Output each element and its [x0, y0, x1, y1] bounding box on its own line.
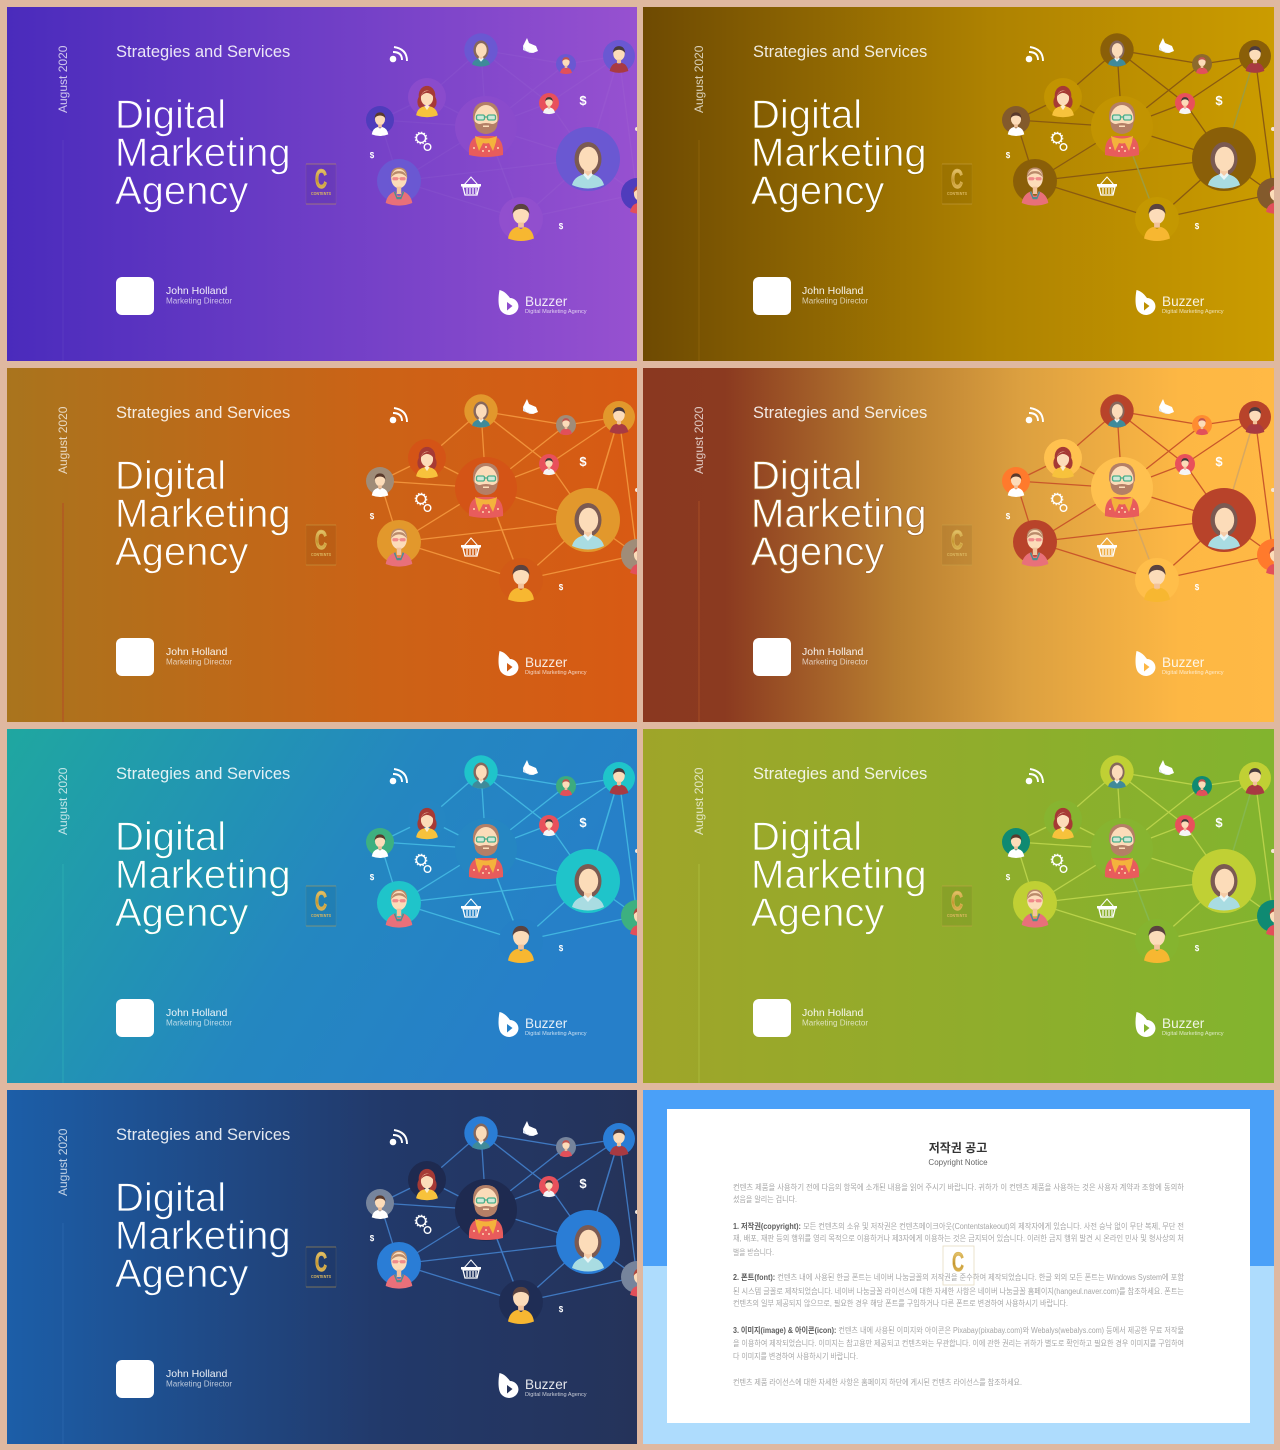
network links [380, 411, 637, 580]
title: Agency [751, 891, 884, 935]
avatars [1002, 394, 1280, 602]
title: Marketing [115, 853, 291, 897]
license note: 컨텐츠 제품 라이선스에 대한 자세한 사항은 홈페이지 하단에 게시된 컨텐츠 라이선스를 참조하세요. [733, 1377, 1022, 1387]
logo: Buzzer: Buzzer [525, 655, 568, 670]
logo: Buzzer: Digital Marketing Agency [1162, 1031, 1224, 1037]
network illustration [366, 1116, 653, 1324]
title: Marketing [751, 131, 927, 175]
clause 3: image and icon: 다 이미지를 변경하여 사용하시기 바랍니다. [733, 1351, 858, 1361]
marketing icons [370, 399, 587, 592]
logo: Buzzer: Digital Marketing Agency [525, 670, 587, 676]
presenter name [802, 286, 868, 305]
marketing icons [1006, 760, 1223, 953]
watermark badge [942, 525, 972, 565]
title: Marketing [115, 131, 291, 175]
title: Digital [751, 454, 862, 498]
title: Digital [751, 93, 862, 137]
logo: Buzzer [499, 1012, 587, 1037]
logo: Buzzer [499, 1373, 587, 1398]
title: Marketing [115, 492, 291, 536]
presenter name: Marketing Director [166, 658, 232, 666]
marketing icons [370, 1121, 587, 1314]
title: Digital [115, 815, 226, 859]
title: Agency [115, 891, 248, 935]
title [751, 93, 927, 213]
title [115, 454, 291, 574]
watermark badge [942, 164, 972, 204]
presenter name: John Holland [166, 646, 227, 658]
notice intro: 셨음을 알리는 겁니다. [733, 1194, 797, 1204]
avatars [366, 1116, 653, 1324]
avatars [366, 394, 653, 602]
date: August 2020 [692, 767, 706, 835]
logo: Buzzer: Buzzer [525, 1016, 568, 1031]
date: August 2020 [56, 1128, 70, 1196]
network links [501, 168, 503, 170]
presenter name [166, 1007, 232, 1028]
network links [380, 772, 637, 941]
presenter name: John Holland [802, 285, 863, 297]
presenter name: John Holland [802, 646, 863, 658]
notice subheading: Copyright Notice [928, 1158, 988, 1167]
slide: navy cover [7, 1090, 653, 1444]
title: Agency [751, 169, 884, 213]
avatars [1002, 33, 1280, 241]
network links [380, 1133, 637, 1302]
slide: gold cover [643, 7, 1280, 361]
slide: purple cover [7, 7, 653, 361]
clause 1: copyright: 재, 배포, 재판 등의 행위를 영리 목적으로 이용하거나 제3자에게 이용하는 것은 금지되어 있습니다. 이러한 금지 행위 발견 시 온라인 민사 및 형사상의 처 [733, 1233, 1184, 1243]
logo: Buzzer: Buzzer [1162, 294, 1205, 309]
title: Digital [751, 815, 862, 859]
subtitle: Strategies and Services [116, 43, 290, 61]
watermark badge [943, 1246, 974, 1285]
clause 2: font: 된 시스템 글꼴로 제작되었습니다. 네이버 나눔글꼴 라이선스에 대한 자세한 사항은 네이버 나눔글꼴 홈페이지(hangeul.naver.com)를 참조하세요. 폰트는 [733, 1286, 1184, 1296]
subtitle: Strategies and Services [753, 765, 927, 783]
avatars [366, 33, 653, 241]
logo: Buzzer: Digital Marketing Agency [1162, 309, 1224, 315]
date: August 2020 [56, 767, 70, 835]
title [751, 454, 927, 574]
title [751, 815, 927, 935]
title: Marketing [751, 853, 927, 897]
presenter name: John Holland [802, 1007, 863, 1019]
clause 3: image and icon: 을 이용하여 제작되었습니다. 이미지는 참고용만 제공되고 컨텐츠와는 무관합니다. 이에 관한 권리는 귀하가 별도로 확인하고 필요한 경우 이미지를 구입하여 [733, 1338, 1184, 1348]
subtitle: Strategies and Services [116, 765, 290, 783]
logo: Buzzer [499, 290, 587, 315]
presenter name [802, 1007, 868, 1028]
notice intro: 컨텐츠 제품을 사용하기 전에 다음의 항목에 소개된 내용을 읽어 주시기 바랍니다. 귀하가 이 컨텐츠 제품을 사용하는 것은 사용자 계약과 조항에 동의하 [733, 1182, 1185, 1192]
network illustration [366, 33, 653, 241]
presenter name: John Holland [166, 285, 227, 297]
network links [1016, 411, 1273, 580]
date: August 2020 [692, 406, 706, 474]
title [115, 815, 291, 935]
presenter name [166, 286, 232, 305]
clause 2: font: 컨텐츠의 일부 제공되지 않으므로, 필요한 경우 해당 폰트를 구입하거나 다른 폰트로 변경하여 사용하시기 바랍니다. [733, 1298, 1068, 1308]
title [115, 1176, 291, 1296]
network illustration [366, 394, 653, 602]
subtitle: Strategies and Services [753, 43, 927, 61]
notice intro [733, 1182, 1185, 1204]
presenter name [802, 646, 868, 666]
avatars [1002, 755, 1280, 963]
title: Digital [115, 93, 226, 137]
presenter name: John Holland [166, 1368, 227, 1380]
title: Agency [115, 1252, 248, 1296]
clause 2: font: 2. 폰트(font): 컨텐츠 내에 사용된 한글 폰트는 네이버 나눔글꼴의 저작권을 준수하여 제작되었습니다. 한글 외의 모든 폰트는 Windows System에 포함 [733, 1272, 1185, 1282]
presenter name: Marketing Director [166, 1018, 232, 1028]
logo: Buzzer [1136, 1012, 1224, 1037]
network links [1016, 772, 1273, 941]
watermark badge [306, 525, 336, 565]
subtitle: Strategies and Services [116, 1126, 290, 1144]
clause 3: image and icon [733, 1325, 1184, 1361]
logo: Buzzer: Buzzer [1162, 655, 1205, 670]
presenter photo placeholder [753, 999, 791, 1037]
marketing icons [370, 38, 587, 231]
date: August 2020 [692, 45, 706, 113]
title: Digital [115, 454, 226, 498]
watermark badge: C [952, 1247, 964, 1277]
slide: copyright notice [643, 1090, 1274, 1444]
watermark badge [942, 886, 972, 926]
logo: Buzzer: Buzzer [525, 1377, 568, 1392]
network illustration [1002, 394, 1280, 602]
logo: Buzzer: Digital Marketing Agency [525, 1031, 587, 1037]
watermark badge [306, 886, 336, 926]
clause 3: image and icon: 3. 이미지(image) & 아이콘(icon): 컨텐츠 내에 사용된 이미지와 아이콘은 Pixabay(pixabay.com)와 Webalys(webalys.com) 등에서 제공한 무료 저작물 [733, 1325, 1184, 1335]
network links [1016, 50, 1273, 219]
notice panel [667, 1109, 1250, 1423]
date: August 2020 [56, 45, 70, 113]
logo: Buzzer: Buzzer [1162, 1016, 1205, 1031]
logo: Buzzer: Buzzer [525, 294, 568, 309]
title: Marketing [751, 492, 927, 536]
marketing icons [370, 760, 587, 953]
slide: green cover [643, 729, 1280, 1083]
presenter name: John Holland [166, 1007, 227, 1019]
watermark badge [306, 1247, 336, 1287]
network illustration [366, 755, 653, 963]
title: Agency [115, 530, 248, 574]
title [115, 93, 291, 213]
slide: orange cover [7, 368, 653, 722]
presenter photo placeholder [753, 277, 791, 315]
subtitle: Strategies and Services [116, 404, 290, 422]
logo: Buzzer: Digital Marketing Agency [1162, 670, 1224, 676]
clause 1: copyright [733, 1221, 1184, 1257]
title: Marketing [115, 1214, 291, 1258]
presenter photo placeholder [116, 999, 154, 1037]
logo: Buzzer [499, 651, 587, 676]
title: Agency [115, 169, 248, 213]
logo: Buzzer [1136, 651, 1224, 676]
logo: Buzzer: Digital Marketing Agency [525, 309, 587, 315]
presenter name: Marketing Director [802, 296, 868, 306]
clause 1: copyright: 1. 저작권(copyright): 모든 컨텐츠의 소유 및 저작권은 컨텐츠메이크아웃(Contentstakeout)의 제작자에게 있습니다. 사전 승낙 없이 무단 복제, 무단 전 [733, 1221, 1184, 1231]
marketing icons [1006, 38, 1223, 231]
presenter photo placeholder [753, 638, 791, 676]
watermark badge [306, 164, 336, 204]
slide: teal blue cover [7, 729, 653, 1083]
presenter name: Marketing Director [802, 1018, 868, 1028]
presenter photo placeholder [116, 277, 154, 315]
avatars [366, 755, 653, 963]
clause 1: copyright: 벌을 받습니다. [733, 1247, 774, 1257]
network illustration [1002, 755, 1280, 963]
marketing icons [1006, 399, 1223, 592]
presenter name: Marketing Director [166, 1380, 232, 1388]
logo: Buzzer [1136, 290, 1224, 315]
presenter name [166, 648, 232, 666]
slide: amber cover [643, 368, 1280, 722]
date: August 2020 [56, 406, 70, 474]
presenter photo placeholder [116, 638, 154, 676]
logo: Buzzer: Digital Marketing Agency [525, 1392, 587, 1398]
presenter photo placeholder [116, 1360, 154, 1398]
notice heading: 저작권 공고 [929, 1140, 987, 1155]
presenter name: Marketing Director [802, 658, 868, 666]
presenter name: Marketing Director [166, 296, 232, 306]
title: Agency [751, 530, 884, 574]
clause 2: font [733, 1272, 1185, 1308]
title: Digital [115, 1176, 226, 1220]
presenter name [166, 1368, 232, 1388]
network illustration [1002, 33, 1280, 241]
subtitle: Strategies and Services [753, 404, 927, 422]
